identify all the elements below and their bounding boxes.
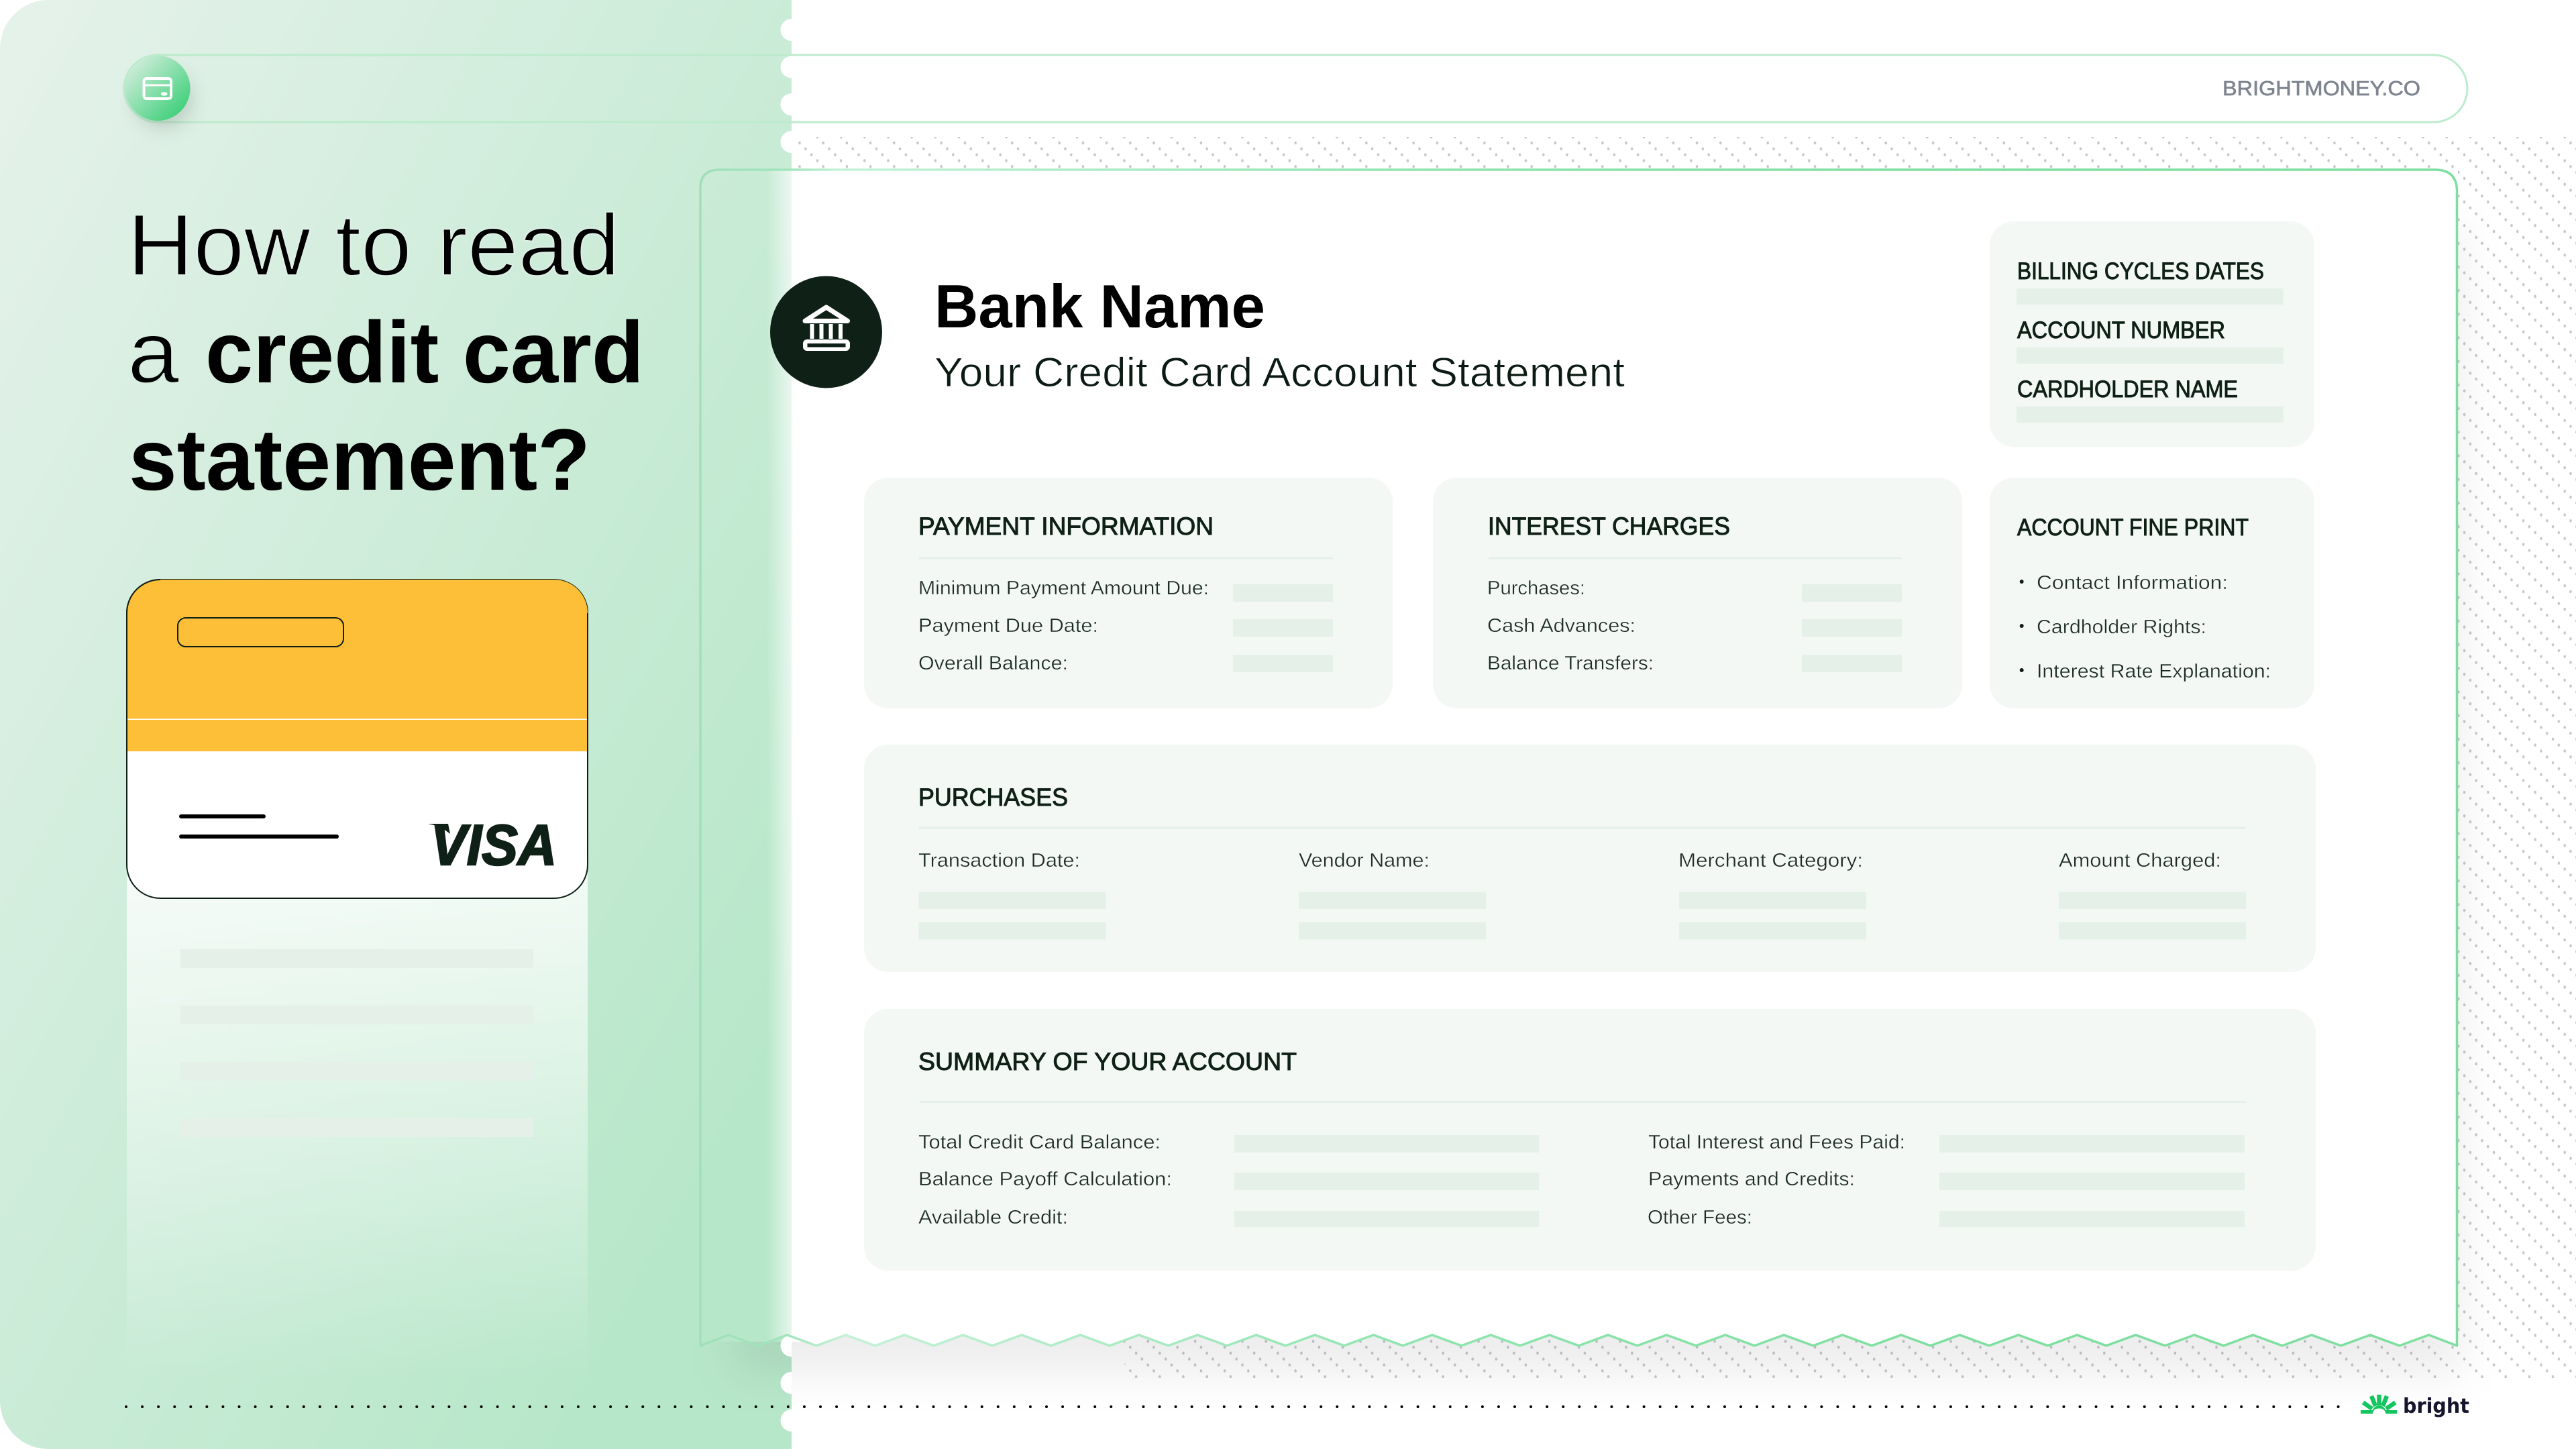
panel: summary of your account: Total Credit Card Balance:	[918, 1132, 1161, 1153]
panel: account details: CARDHOLDER NAME	[2017, 376, 2238, 402]
panel: purchases: Amount Charged:	[2059, 850, 2221, 871]
panel: purchases: Vendor Name:	[1299, 850, 1430, 871]
panel: summary of your account: Total Interest and Fees Paid:	[1648, 1132, 1905, 1153]
title: statement?	[129, 411, 590, 508]
icon: credit card button	[125, 56, 191, 127]
top address bar	[124, 55, 2467, 122]
panel: summary of your account	[864, 1009, 2316, 1271]
statement subtitle: Your Credit Card Account Statement	[934, 350, 1625, 395]
panel: payment information	[864, 478, 1393, 708]
panel: account fine print	[1990, 478, 2314, 708]
panel: account fine print: ACCOUNT FINE PRINT	[2017, 515, 2249, 541]
panel: account details: ACCOUNT NUMBER	[2017, 317, 2225, 343]
panel: summary of your account: Balance Payoff Calculation:	[918, 1169, 1172, 1190]
statement heading: Bank Name	[934, 273, 1265, 341]
panel: interest charges: Purchases:	[1487, 578, 1585, 599]
panel: payment information: Overall Balance:	[918, 653, 1068, 674]
statement sheet	[700, 170, 2457, 1346]
panel: summary of your account: Available Credit:	[918, 1207, 1068, 1228]
bright logo: bright	[2403, 1395, 2469, 1418]
panel: interest charges: INTEREST CHARGES	[1488, 513, 1730, 540]
panel: purchases: Merchant Category:	[1678, 850, 1863, 871]
panel: account fine print: Interest Rate Explanation:	[2037, 661, 2271, 682]
title: a	[127, 303, 180, 401]
receipt under credit card	[127, 872, 588, 1405]
title	[127, 196, 644, 508]
panel edge perforations	[781, 19, 792, 1432]
panel: purchases: PURCHASES	[918, 784, 1068, 811]
panel: purchases: Transaction Date:	[918, 850, 1080, 871]
panel: account details: BILLING CYCLES DATES	[2017, 258, 2264, 284]
panel: interest charges: Balance Transfers:	[1487, 653, 1654, 674]
bright logo	[2361, 1395, 2469, 1418]
panel: summary of your account: Other Fees:	[1648, 1207, 1752, 1228]
dotted footer line	[126, 1405, 2348, 1408]
title: credit card	[205, 303, 644, 401]
panel: account details	[1990, 221, 2314, 447]
panel: summary of your account: SUMMARY OF YOUR ACCOUNT	[918, 1048, 1297, 1075]
title: How to read	[127, 196, 620, 294]
dotted background pattern	[792, 137, 2576, 1378]
panel: account fine print: Cardholder Rights:	[2037, 616, 2206, 638]
statement drop shadow	[731, 228, 2462, 1375]
website url: BRIGHTMONEY.CO	[2222, 76, 2420, 100]
left green panel	[0, 0, 792, 1449]
icon: bank	[770, 276, 882, 388]
panel: interest charges	[1433, 478, 1962, 708]
panel: payment information: Payment Due Date:	[918, 615, 1098, 637]
panel: summary of your account: Payments and Credits:	[1648, 1169, 1855, 1190]
panel: purchases	[864, 745, 2316, 972]
panel: payment information: PAYMENT INFORMATION	[918, 513, 1214, 540]
statement heading	[934, 273, 1625, 395]
panel: interest charges: Cash Advances:	[1487, 615, 1635, 637]
panel: account fine print: Contact Information:	[2037, 572, 2228, 594]
panel: payment information: Minimum Payment Amount Due:	[918, 578, 1209, 599]
visa logo: VISA	[431, 814, 557, 877]
credit card	[127, 580, 588, 898]
